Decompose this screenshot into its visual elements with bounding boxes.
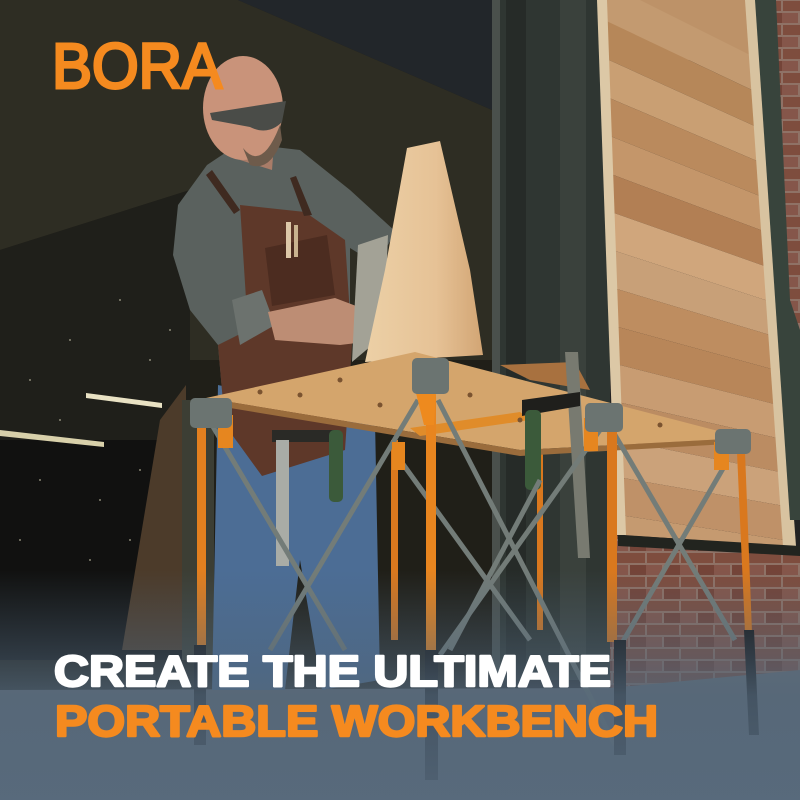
pavement <box>0 670 800 800</box>
leg caps <box>190 358 751 454</box>
wooden obelisk <box>365 141 483 362</box>
table top <box>206 352 745 456</box>
bench dog holes <box>258 378 662 428</box>
steel column <box>492 0 610 680</box>
forearm and hand <box>268 298 372 345</box>
safety glasses <box>210 101 286 131</box>
green column and upper brick <box>755 0 800 520</box>
apron pocket with tools <box>265 235 335 306</box>
brand logo: BORA <box>52 30 222 102</box>
beard <box>243 125 282 166</box>
headline: CREATE THE ULTIMATE <box>54 647 611 696</box>
lower brick wall <box>610 535 800 690</box>
headline: PORTABLE WORKBENCH <box>55 697 658 746</box>
sander <box>352 235 388 362</box>
shirt <box>173 143 396 390</box>
bottom fade <box>0 570 800 800</box>
overhead door beam <box>238 0 492 110</box>
x-braces <box>212 400 735 745</box>
garage interior background <box>0 0 500 800</box>
siding trim boards <box>597 0 796 546</box>
sawdust specks <box>19 299 171 561</box>
jeans <box>212 385 380 690</box>
neck and head <box>235 130 275 170</box>
apron straps <box>206 170 312 216</box>
orange legs <box>194 393 759 780</box>
wood siding wall <box>607 0 783 545</box>
rolled sleeve <box>232 290 275 345</box>
leather apron <box>218 205 352 476</box>
far table legs <box>391 440 543 640</box>
headline <box>54 647 658 746</box>
clamps <box>272 352 590 566</box>
man <box>173 56 396 690</box>
